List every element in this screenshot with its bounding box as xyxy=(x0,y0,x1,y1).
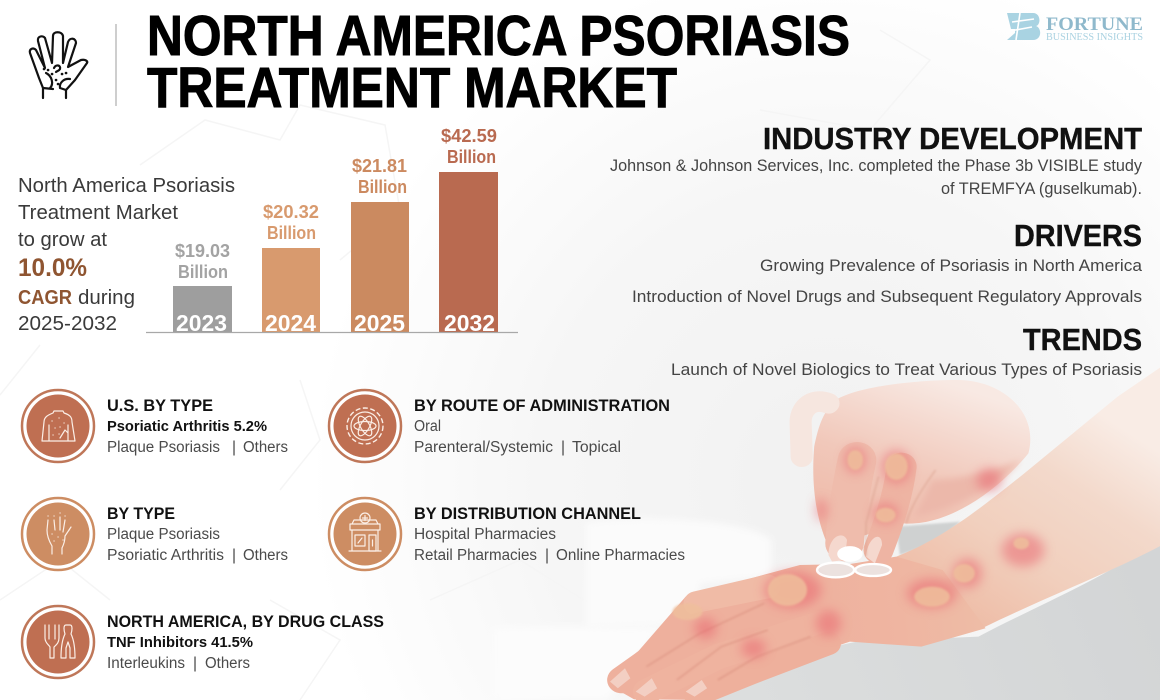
panel: by type: BY TYPE xyxy=(107,504,175,523)
icon: hand with lesions xyxy=(22,498,94,570)
panel: by distribution channel xyxy=(329,498,685,570)
panel: drivers: Growing Prevalence of Psoriasis in North America xyxy=(760,257,1143,275)
upper hand xyxy=(801,380,1030,563)
icon: pharmacy storefront xyxy=(329,498,401,570)
panel: by route of administration xyxy=(329,390,670,462)
finger gaps xyxy=(646,603,811,680)
title xyxy=(147,4,850,120)
panel: trends xyxy=(671,322,1142,379)
panel: U.S. by type: U.S. BY TYPE xyxy=(107,396,213,415)
forearm xyxy=(896,360,1160,628)
towel xyxy=(711,543,1160,700)
panel: U.S. by type: Psoriatic Arthritis 5.2% xyxy=(107,418,267,435)
bar 2024 xyxy=(262,201,320,336)
curled finger xyxy=(801,402,828,457)
bar 2025: $21.81 xyxy=(352,155,407,176)
CAGR text block: 10.0% xyxy=(18,254,87,282)
pressing fingers xyxy=(845,460,902,550)
psoriasis plaques xyxy=(672,447,1044,658)
icon: gear with atom xyxy=(329,390,401,462)
panel: by route of administration: | xyxy=(561,439,565,456)
table surface xyxy=(493,627,661,700)
bar 2032 xyxy=(439,125,498,336)
panel: North America by drug class: NORTH AMERICA, BY DRUG CLASS xyxy=(107,612,384,631)
bar 2032: $42.59 xyxy=(441,125,497,146)
finger nails xyxy=(610,668,707,697)
bar 2024: 2024 xyxy=(265,310,316,336)
panel: drivers: DRIVERS xyxy=(1014,218,1142,253)
bar 2023: Billion xyxy=(178,261,228,282)
bar 2032: 2032 xyxy=(444,310,495,336)
panel: by route of administration: BY ROUTE OF ADMINISTRATION xyxy=(414,396,670,415)
chart axis xyxy=(146,332,518,334)
panel: trends: Launch of Novel Biologics to Treat Various Types of Psoriasis xyxy=(671,361,1142,379)
bar 2023: 2023 xyxy=(176,310,227,336)
panel: industry development: INDUSTRY DEVELOPMENT xyxy=(763,121,1142,156)
panel: drivers: Introduction of Novel Drugs and Subsequent Regulatory Approvals xyxy=(632,288,1142,306)
panel: U.S. by type xyxy=(22,390,288,462)
panel: North America by drug class: | xyxy=(193,655,197,672)
panel: North America by drug class: Interleukins xyxy=(107,655,185,672)
CAGR text block xyxy=(18,175,235,335)
title: TREATMENT MARKET xyxy=(147,56,677,120)
CAGR text block: during xyxy=(78,287,135,309)
panel: by type: Others xyxy=(243,547,288,564)
bar 2025: Billion xyxy=(358,176,407,197)
icon: antibody fork shapes xyxy=(22,606,94,678)
panel: by distribution channel: Online Pharmacies xyxy=(556,547,685,564)
CAGR text block: to grow at xyxy=(18,229,107,251)
panel: industry development xyxy=(610,121,1143,198)
hand webbing between fingers xyxy=(623,576,770,700)
panel: trends: TRENDS xyxy=(1023,322,1142,357)
panel: U.S. by type: Others xyxy=(243,439,288,456)
panel: by distribution channel: | xyxy=(545,547,549,564)
bar 2024: Billion xyxy=(267,222,316,243)
title: NORTH AMERICA PSORIASIS xyxy=(147,4,850,68)
finger gap xyxy=(866,470,936,557)
background hexagon pattern xyxy=(0,30,930,700)
icon: torso with spots xyxy=(22,390,94,462)
bar 2025: 2025 xyxy=(354,310,405,336)
bar 2023: $19.03 xyxy=(175,240,230,261)
cream jar xyxy=(729,530,766,570)
panel: by route of administration: Topical xyxy=(572,439,621,456)
logo: Fortune Business Insights: BUSINESS INSIGHTS xyxy=(1046,32,1143,43)
panel: North America by drug class: Others xyxy=(205,655,250,672)
panel: drivers xyxy=(632,218,1143,306)
panel: by type: Psoriatic Arthritis xyxy=(107,547,224,564)
bar 2024: $20.32 xyxy=(263,201,319,222)
bar 2025 xyxy=(351,155,409,336)
panel: industry development: Johnson & Johnson Services, Inc. completed the Phase 3b VISIBLE study xyxy=(610,157,1143,175)
panel: by type: Plaque Psoriasis xyxy=(107,526,220,543)
panel: by type xyxy=(22,498,288,570)
CAGR text block: Treatment Market xyxy=(18,202,178,224)
CAGR text block: 2025-2032 xyxy=(18,313,117,335)
panel: U.S. by type: | xyxy=(232,439,236,456)
towel fold xyxy=(896,522,961,555)
panel: industry development: of TREMFYA (guselkumab). xyxy=(941,180,1142,198)
cream blob xyxy=(817,547,891,577)
panel: North America by drug class xyxy=(22,606,384,678)
lower hand xyxy=(609,557,986,700)
panel: by route of administration: Parenteral/Systemic xyxy=(414,439,553,456)
photo: hand with psoriasis receiving cream xyxy=(493,360,1160,700)
panel: by distribution channel: Hospital Pharmacies xyxy=(414,526,556,543)
icon: hand with psoriasis spots xyxy=(30,32,87,98)
divider xyxy=(115,24,117,106)
panel: by distribution channel: Retail Pharmacies xyxy=(414,547,537,564)
panel: by type: | xyxy=(232,547,236,564)
panel: U.S. by type: Plaque Psoriasis xyxy=(107,439,220,456)
bar 2032: Billion xyxy=(447,146,496,167)
bar 2023 xyxy=(173,240,232,336)
logo: Fortune Business Insights: FORTUNE xyxy=(1046,14,1143,35)
panel: by route of administration: Oral xyxy=(414,418,441,435)
nails xyxy=(828,535,882,563)
thumb shading xyxy=(922,462,1020,512)
fingers xyxy=(621,587,828,695)
bar chart xyxy=(146,125,518,336)
panel: North America by drug class: TNF Inhibitors 41.5% xyxy=(107,634,253,651)
CAGR text block: CAGR xyxy=(18,287,73,309)
panel: by distribution channel: BY DISTRIBUTION CHANNEL xyxy=(414,504,641,523)
CAGR text block: North America Psoriasis xyxy=(18,175,235,197)
logo: Fortune Business Insights xyxy=(1007,13,1143,43)
